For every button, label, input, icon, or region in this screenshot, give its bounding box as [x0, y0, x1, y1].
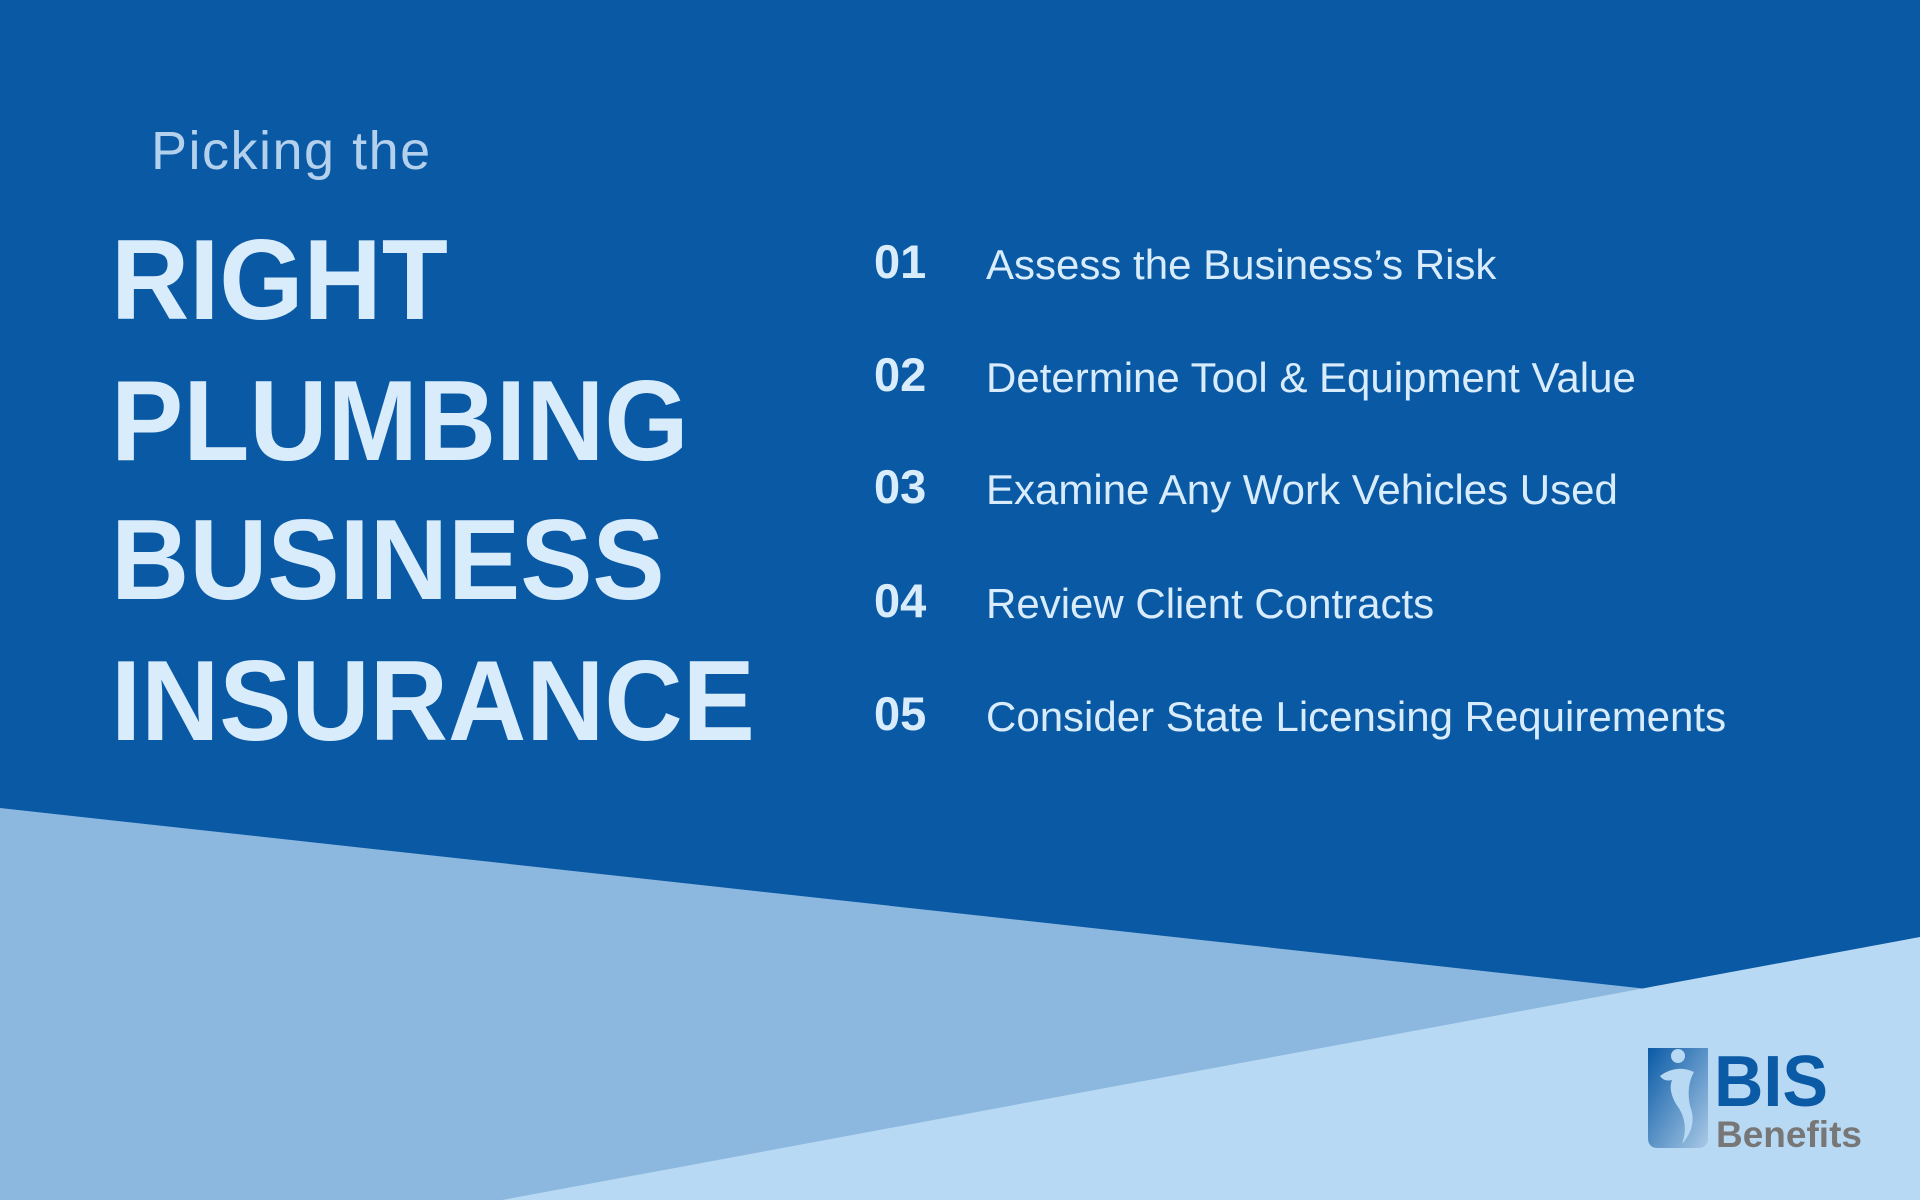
- logo: BIS: [1714, 1042, 1828, 1122]
- list of steps: 02: [874, 348, 926, 401]
- subtitle: Picking the: [151, 121, 432, 181]
- list of steps: [874, 235, 1726, 740]
- logo: [1648, 1042, 1862, 1155]
- list of steps: Review Client Contracts: [986, 580, 1434, 627]
- title: [111, 217, 755, 765]
- list of steps: 05: [874, 687, 926, 740]
- list of steps: Assess the Business’s Risk: [986, 241, 1496, 288]
- title: RIGHT: [111, 217, 448, 344]
- list of steps: 03: [874, 460, 926, 513]
- title: BUSINESS: [111, 497, 665, 624]
- list of steps: 01: [874, 235, 926, 288]
- icon: shield: [1648, 1048, 1708, 1148]
- title: INSURANCE: [111, 638, 755, 765]
- logo: Benefits: [1716, 1114, 1862, 1155]
- list of steps: 04: [874, 574, 926, 627]
- list of steps: Examine Any Work Vehicles Used: [986, 466, 1618, 513]
- title: PLUMBING: [111, 358, 689, 485]
- list of steps: Consider State Licensing Requirements: [986, 693, 1726, 740]
- list of steps: Determine Tool & Equipment Value: [986, 354, 1636, 401]
